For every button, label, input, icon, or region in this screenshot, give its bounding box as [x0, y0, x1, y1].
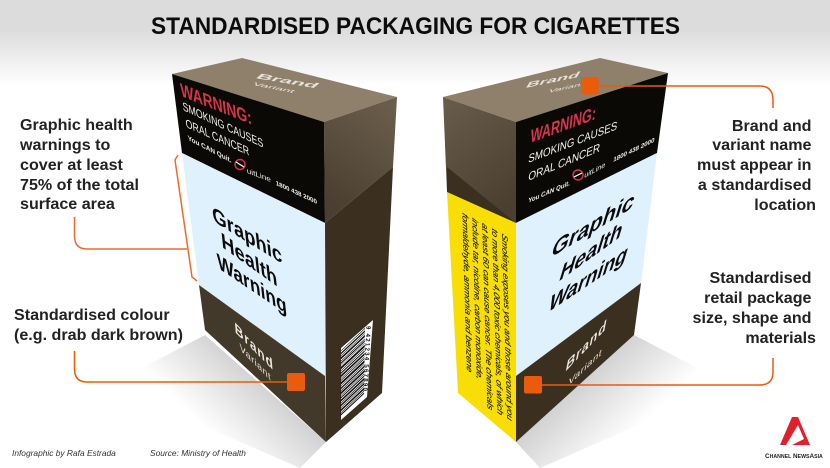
warning text: WARNING: [179, 79, 253, 129]
yellow panel text: formaldehyde, ammonia and benzene [461, 211, 474, 374]
brown lower panel [516, 283, 641, 442]
yellow panel text: to more than 4,000 toxic chemicals, of which [490, 227, 504, 417]
light blue graphic warning panel [516, 153, 657, 376]
warning text: SMOKING CAUSES [182, 100, 264, 151]
light blue graphic warning panel [182, 153, 325, 376]
black warning panel [516, 73, 668, 223]
label: graphic health warnings: surface area [20, 195, 116, 213]
top brand text: Brand [524, 70, 582, 90]
barcode [340, 320, 373, 420]
label: graphic health warnings: Graphic health [20, 116, 133, 134]
label: brand and variant: Brand and [732, 117, 812, 135]
graphic health warning text: Warning [216, 248, 288, 320]
label: brand and variant: location [754, 196, 816, 214]
lower brand text: Brand [564, 314, 609, 376]
side face upper [443, 97, 516, 223]
label: brand and variant: variant name [712, 136, 812, 154]
warning text: 1800 438 2000 [276, 180, 318, 206]
label: brand and variant: a standardised [698, 176, 812, 194]
graphic health warning text: Warning [545, 238, 632, 319]
top brand text: Variant [547, 81, 586, 94]
lower brand text: Brand [234, 319, 274, 375]
label: standardised colour: (e.g. drab dark brown) [14, 326, 183, 344]
top brand text: Variant [251, 82, 296, 94]
graphic health warning text: Graphic [211, 201, 283, 269]
left pack shadow [110, 335, 326, 468]
side face upper [324, 97, 397, 223]
callout: standardised package [524, 358, 773, 394]
warning text: SMOKING CAUSES [528, 120, 618, 166]
graphic health warning text [545, 187, 638, 319]
label: graphic health warnings: cover at least [20, 156, 124, 174]
warning text: You CAN Quit. [187, 134, 232, 165]
warning text [528, 102, 655, 205]
graphic health warning text: Health [556, 215, 627, 288]
warning text: uitLine [246, 167, 272, 184]
yellow panel text: at least 60 can cause cancer. The chemicals [480, 222, 494, 412]
barcode: 9 421234 567890 [361, 326, 371, 392]
right pack shadow [516, 335, 730, 468]
label: graphic health warnings: 75% of the total [20, 176, 139, 194]
warning text: uitLine [584, 160, 606, 180]
lower brand text: Variant [567, 345, 603, 389]
brown lower panel [199, 285, 326, 442]
label: standardised package: retail package [704, 289, 812, 307]
callout line: warnings bracket [74, 155, 197, 281]
graphic health warning text: Health [220, 227, 279, 292]
warning text: 1800 438 2000 [613, 137, 655, 164]
label: standardised package: Standardised [710, 269, 812, 287]
label: standardised package: materials [745, 329, 816, 347]
warning text: WARNING: [530, 102, 597, 148]
label: standardised package: size, shape and [693, 309, 812, 327]
left cigarette pack [172, 58, 397, 442]
yellow side panel [447, 192, 516, 442]
callout: standardised colour [74, 351, 305, 391]
label: brand and variant: must appear in [697, 156, 812, 174]
title: STANDARDISED PACKAGING FOR CIGARETTES [151, 13, 680, 40]
top brand text: Brand [253, 72, 322, 90]
logo: Channel NewsAsia [765, 417, 823, 460]
side flap shadow [447, 167, 516, 223]
warning text: ORAL CANCER [185, 117, 250, 159]
graphic health warning text [211, 201, 288, 320]
yellow panel text: Smoking exposes you and those around you [500, 232, 514, 423]
logo: Channel NewsAsia: CHANNEL NEWSASIA [765, 453, 823, 460]
warning text [179, 79, 318, 206]
label: standardised colour: Standardised colour [14, 306, 170, 324]
label: graphic health warnings: warnings to [19, 136, 110, 154]
background gradient band [0, 0, 830, 86]
graphic health warning text: Graphic [548, 187, 638, 264]
black warning panel [172, 74, 325, 223]
warning text: You CAN Quit. [528, 180, 570, 205]
warning text: ORAL CANCER [528, 142, 601, 184]
top face [443, 58, 668, 122]
side face lower [325, 167, 393, 442]
source: Source: Ministry of Health [150, 448, 246, 458]
lower brand text: Variant [239, 342, 272, 384]
yellow panel text: include tar, nicotine, carbon monoxide, [471, 217, 484, 382]
right cigarette pack [443, 58, 668, 442]
top face [172, 58, 397, 122]
credit: Infographic by Rafa Estrada [12, 448, 116, 458]
yellow panel text [461, 211, 514, 423]
callout: brand and variant [581, 77, 773, 108]
